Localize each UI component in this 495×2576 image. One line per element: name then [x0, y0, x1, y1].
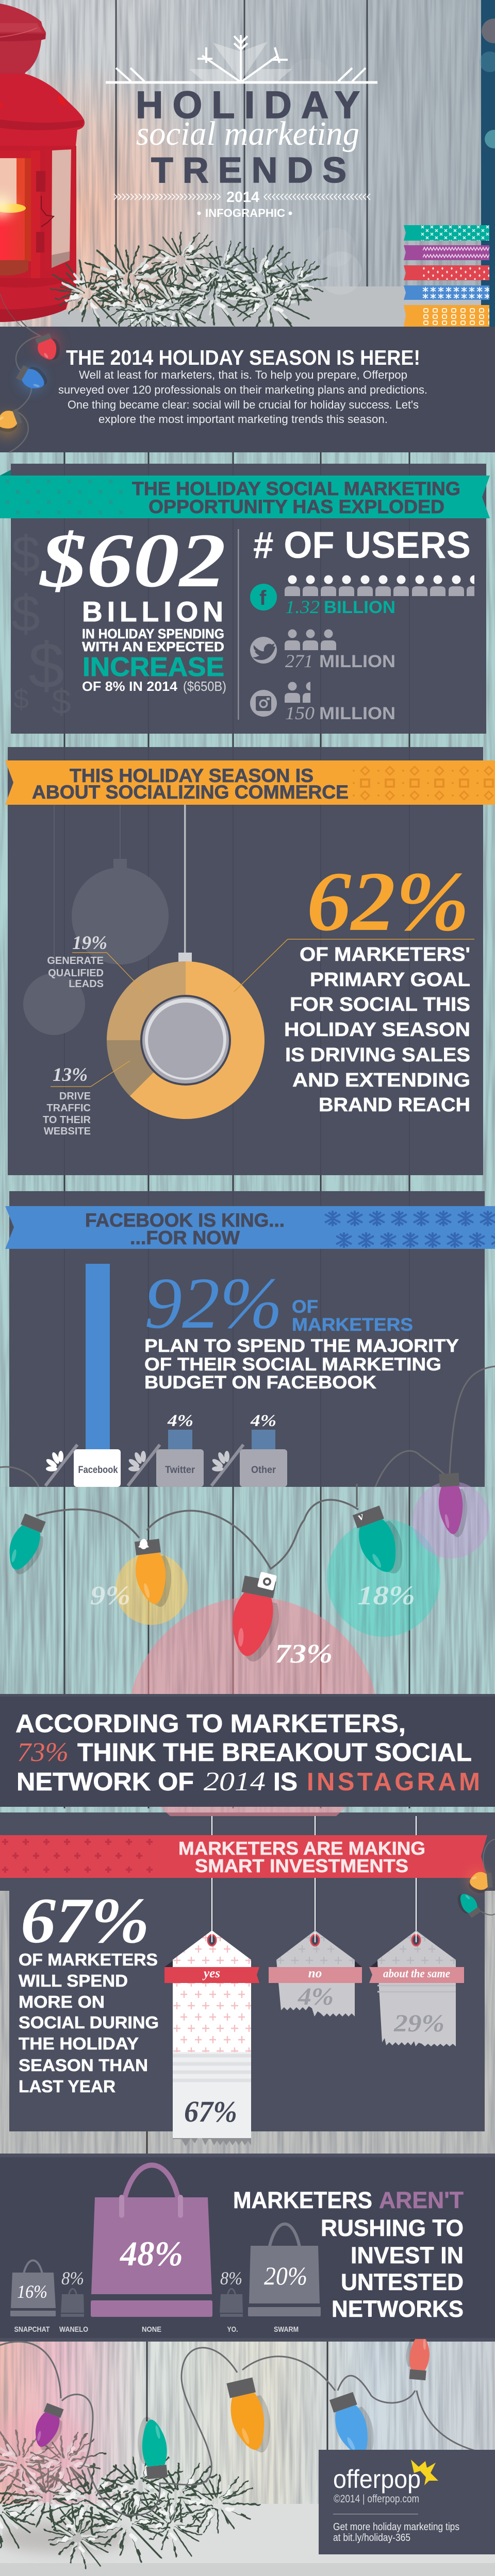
- stat: 18 percent: 18%: [357, 1581, 415, 1611]
- stat: 67 percent: WILL SPEND: [19, 1971, 128, 1990]
- panel: opportunity: [0, 464, 490, 734]
- stat: 62 percent: FOR SOCIAL THIS: [290, 994, 470, 1015]
- label: 19 percent: [47, 933, 145, 993]
- heading: HOLIDAY: HOLIDAY: [136, 83, 360, 126]
- row: instagram: MILLION: [319, 704, 395, 723]
- bulb: red instagram: [225, 1572, 286, 1665]
- footer panel: offerpop: [319, 2450, 495, 2554]
- heading: INVEST IN: [351, 2242, 464, 2268]
- bag chart: [10, 2165, 321, 2334]
- bulb: teal vine: [350, 1502, 411, 1581]
- tag: no: [269, 1930, 362, 2016]
- lantern dome: [0, 74, 85, 146]
- stat: 67 percent: [19, 1885, 159, 2096]
- chevron rule with year: 2014: [226, 189, 259, 206]
- red ribbon heading: SMART INVESTMENTS: [195, 1855, 408, 1876]
- bulb: teal: [1, 1513, 52, 1579]
- bulb: teal vine: v: [356, 1509, 366, 1523]
- teal ribbon heading: OPPORTUNITY HAS EXPLODED: [148, 496, 444, 517]
- copyright: ©2014 | offerpop.com: [334, 2493, 419, 2505]
- bar: facebook: [45, 1264, 121, 1487]
- light string cord: [36, 1484, 358, 1569]
- bag: none: NONE: [142, 2325, 161, 2334]
- bulb: orange: [226, 2377, 270, 2452]
- bag: swarm: [248, 2224, 321, 2334]
- glow: vine: [327, 1519, 440, 1637]
- stat: 67 percent: MORE ON: [19, 1992, 105, 2011]
- stat: 62 percent: OF MARKETERS': [300, 944, 470, 965]
- bulb: purple: [437, 1472, 469, 1538]
- stat: 62 percent: [234, 854, 474, 1116]
- hero photo background: wooden planks: [0, 0, 495, 371]
- glow: snapchat: [116, 1553, 188, 1625]
- stat: $602 billion: WITH AN EXPECTED: [82, 639, 224, 654]
- bag: snapchat: 16%: [17, 2281, 47, 2302]
- row: facebook: 1.32: [285, 597, 320, 617]
- lantern frame: [0, 146, 76, 289]
- teal wood background: [0, 452, 495, 1812]
- intro heading: THE 2014 HOLIDAY SEASON IS HERE!: [66, 346, 420, 369]
- decorative dollar signs: $: [11, 526, 40, 583]
- label: 19 percent: QUALIFIED: [48, 968, 104, 979]
- label: 13 percent: DRIVE: [59, 1091, 91, 1102]
- panel: smart investments: [0, 1816, 495, 2146]
- tag: no: no: [308, 1967, 322, 1980]
- row: instagram: [250, 682, 395, 723]
- cord in panel: [0, 1366, 495, 1487]
- bar: facebook: Facebook: [78, 1465, 118, 1476]
- chevron rule with year: [114, 189, 370, 206]
- band: instagram breakout: 2014: [204, 1767, 266, 1797]
- pine branch with snow: [40, 224, 333, 357]
- intro paragraph: Well at least for marketers, that is. To help you prepare, Offerpop: [79, 368, 407, 381]
- logo burst: [411, 2460, 438, 2485]
- teal ribbon heading: [0, 470, 490, 518]
- stat: 67 percent: 67%: [21, 1885, 150, 1957]
- bar: other: Other: [251, 1465, 276, 1476]
- bulb: orange snapchat: [132, 1538, 175, 1609]
- heading: TRENDS: TRENDS: [151, 150, 346, 190]
- tag: yes: [164, 1930, 259, 2146]
- row: facebook: BILLION: [324, 598, 395, 617]
- label: 13 percent: TO THEIR: [43, 1114, 91, 1126]
- stat: $602 billion: IN HOLIDAY SPENDING: [82, 626, 224, 641]
- grey wood background: [0, 1891, 495, 2154]
- stat: 62 percent: AND EXTENDING: [292, 1070, 470, 1091]
- stat: 67 percent: SEASON THAN: [19, 2056, 148, 2075]
- teal ribbon heading: THE HOLIDAY SOCIAL MARKETING: [132, 478, 460, 499]
- stat: 62 percent: IS DRIVING SALES: [285, 1044, 470, 1066]
- glow: pinterest purple: [412, 1481, 490, 1558]
- row: facebook: [250, 575, 474, 613]
- blue ribbon heading: ...FOR NOW: [130, 1227, 240, 1248]
- intro paragraph: explore the most important marketing trends this season.: [98, 413, 388, 426]
- bag: swarm: SWARM: [274, 2325, 299, 2334]
- orange ribbon heading: ABOUT SOCIALIZING COMMERCE: [32, 782, 349, 803]
- band: instagram breakout: ACCORDING TO MARKETERS,: [15, 1710, 406, 1738]
- bag: swarm: 20%: [264, 2261, 307, 2290]
- stat: 92 percent: OF THEIR SOCIAL MARKETING: [144, 1354, 441, 1375]
- red ribbon heading: MARKETERS ARE MAKING: [178, 1838, 425, 1859]
- stat: 67 percent: LAST YEAR: [19, 2077, 116, 2096]
- heading: RUSHING TO: [321, 2215, 464, 2241]
- stat: $602 billion: ($650B): [183, 679, 226, 694]
- bulb: blue: [329, 2392, 373, 2450]
- heading: [233, 2187, 464, 2322]
- bag: none: 48%: [119, 2234, 183, 2273]
- band: instagram breakout: INSTAGRAM: [307, 1768, 480, 1796]
- bag: snapchat: SNAPCHAT: [14, 2325, 50, 2334]
- intro paragraph: [58, 368, 427, 426]
- stat: 62 percent: HOLIDAY SEASON: [284, 1019, 470, 1041]
- snowflake emblem: [106, 35, 377, 82]
- stat: 62 percent: PRIMARY GOAL: [310, 969, 470, 991]
- bulb: teal: [138, 2417, 168, 2479]
- decorative dollar signs: $: [13, 684, 29, 715]
- stat: 92 percent: MARKETERS: [292, 1315, 413, 1335]
- panel: socializing commerce: [5, 747, 495, 1175]
- stat: 67 percent: SOCIAL DURING: [19, 2013, 159, 2032]
- decorative dollar signs: [11, 526, 71, 721]
- label: 19 percent: 19%: [72, 933, 107, 954]
- logo wordmark: offerpop: [333, 2465, 421, 2494]
- stat: $602 billion: INCREASE: [82, 652, 224, 682]
- bag: none: [91, 2165, 212, 2334]
- stat: 73 percent: 73%: [275, 1639, 333, 1669]
- orange ribbon heading: [5, 760, 495, 805]
- title block: [106, 35, 377, 219]
- tag: about the same: [369, 1930, 464, 2046]
- pink light wash over branch: [0, 2411, 93, 2494]
- breakout network lights: [0, 1472, 495, 1848]
- bar chart: facebook budget: [45, 1264, 287, 1487]
- lantern cap: [0, 4, 46, 74]
- band: instagram breakout: 73%: [17, 1738, 69, 1767]
- blue ribbon heading: [5, 1206, 495, 1249]
- label: 13 percent: WEBSITE: [44, 1126, 91, 1137]
- cords and bulbs: [0, 320, 64, 452]
- tag: about the same: about the same: [383, 1967, 450, 1980]
- bar: twitter: Twitter: [165, 1465, 195, 1476]
- label: 13 percent: TRAFFIC: [46, 1103, 91, 1114]
- stat: 92 percent: BUDGET ON FACEBOOK: [144, 1372, 376, 1393]
- blue ribbon heading: FACEBOOK IS KING...: [85, 1210, 285, 1231]
- hanging strings: [212, 1816, 416, 1940]
- band: instagram breakout: THINK THE BREAKOUT SOCIAL: [77, 1739, 472, 1767]
- stat: 67 percent: THE HOLIDAY: [19, 2034, 139, 2053]
- call to action: [333, 2521, 459, 2544]
- bulb: coral: [406, 2339, 430, 2380]
- label: 13 percent: [43, 1061, 130, 1137]
- intro band: [0, 320, 495, 452]
- tag: about the same: 29%: [393, 2010, 444, 2037]
- label: infographic: INFOGRAPHIC: [205, 207, 285, 219]
- band: instagram breakout: NETWORK OF: [16, 1768, 194, 1796]
- band: instagram breakout: IS: [273, 1768, 298, 1796]
- decorative dollar signs: $: [11, 585, 40, 642]
- heading: AREN'T: [379, 2187, 464, 2213]
- stat: 92 percent: [144, 1262, 459, 1393]
- label: 19 percent: GENERATE: [47, 955, 104, 967]
- bag: wanelo: WANELO: [59, 2325, 88, 2334]
- bar: other: [211, 1412, 287, 1487]
- red ribbon heading: [0, 1835, 487, 1878]
- bulb: purple: [35, 2403, 64, 2450]
- orange ribbon heading: THIS HOLIDAY SEASON IS: [70, 765, 314, 786]
- lit window and candle: [0, 158, 16, 211]
- row: twitter: MILLION: [319, 652, 395, 671]
- row: facebook: f: [259, 587, 267, 609]
- lantern base: [0, 278, 75, 289]
- bar: twitter: [127, 1412, 204, 1487]
- footer light string: [0, 2330, 495, 2515]
- decorative dollar signs: $: [52, 682, 71, 721]
- bar: twitter: 4%: [167, 1412, 193, 1430]
- stat: 92 percent: PLAN TO SPEND THE MAJORITY: [144, 1336, 459, 1356]
- bag: yo: 8%: [220, 2268, 242, 2289]
- stat: $602 billion: BILLION: [82, 596, 223, 628]
- patterned washi tapes: [404, 225, 489, 327]
- row: twitter: [250, 630, 395, 671]
- stat: 92 percent: OF: [292, 1297, 318, 1317]
- decorative dollar signs: $: [28, 630, 64, 702]
- call to action: at bit.ly/holiday-365: [333, 2532, 410, 2544]
- heading: UNTESTED: [341, 2269, 464, 2295]
- heading: MARKETERS: [233, 2187, 372, 2213]
- tag: yes: yes: [202, 1967, 220, 1980]
- band: untested networks: [0, 2154, 495, 2342]
- footer photo background: [0, 2342, 495, 2576]
- stat: 62 percent: BRAND REACH: [319, 1094, 470, 1116]
- wood grain through glows: [0, 1487, 495, 1694]
- glow: instagram: [128, 1597, 378, 1848]
- bag: wanelo: [59, 2268, 88, 2334]
- tag: no: 4%: [298, 1983, 334, 2010]
- background ornaments: [23, 805, 169, 1035]
- stat: $602 billion: [39, 518, 226, 694]
- stat: 62 percent: 62%: [307, 854, 469, 948]
- bag: wanelo: 8%: [61, 2268, 84, 2289]
- bar: other: 4%: [250, 1412, 276, 1430]
- right glass pane: [52, 149, 71, 268]
- bag: yo: [220, 2268, 243, 2334]
- label: 13 percent: 13%: [53, 1064, 88, 1086]
- tag: yes: 67%: [184, 2095, 237, 2128]
- row: instagram: 150: [285, 703, 315, 723]
- band: instagram breakout: [0, 1694, 495, 1807]
- stat: 67 percent: OF MARKETERS: [19, 1950, 158, 1969]
- red lantern with candle: [0, 4, 85, 328]
- call to action: Get more holiday marketing tips: [333, 2521, 459, 2533]
- intro paragraph: surveyed over 120 professionals on their marketing plans and predictions.: [58, 383, 427, 396]
- heading: social marketing: social marketing: [136, 115, 359, 152]
- heading: # OF USERS: [253, 524, 471, 566]
- stat: $602 billion: OF 8% IN 2014: [82, 679, 178, 694]
- stat: 9 percent: 9%: [90, 1581, 130, 1611]
- row: twitter: 271: [285, 651, 313, 671]
- divider: [238, 529, 239, 720]
- stat: $602 billion: $602: [39, 518, 226, 603]
- donut ornament chart: [107, 805, 265, 1119]
- bag: snapchat: [10, 2261, 56, 2334]
- panel: facebook is king: [0, 1191, 495, 1487]
- stat: 92 percent: 92%: [144, 1262, 283, 1344]
- label: 19 percent: LEADS: [69, 978, 104, 990]
- intro paragraph: One thing became clear: social will be crucial for holiday success. Let's: [68, 398, 419, 411]
- chart: number of users: [250, 524, 482, 723]
- pine branch with snow, lower: [0, 2421, 263, 2576]
- right blue bokeh strip: [480, 0, 495, 328]
- heading: NETWORKS: [332, 2296, 464, 2322]
- bag: yo: YO.: [227, 2325, 238, 2334]
- decorative corner bulbs: [453, 1839, 495, 1920]
